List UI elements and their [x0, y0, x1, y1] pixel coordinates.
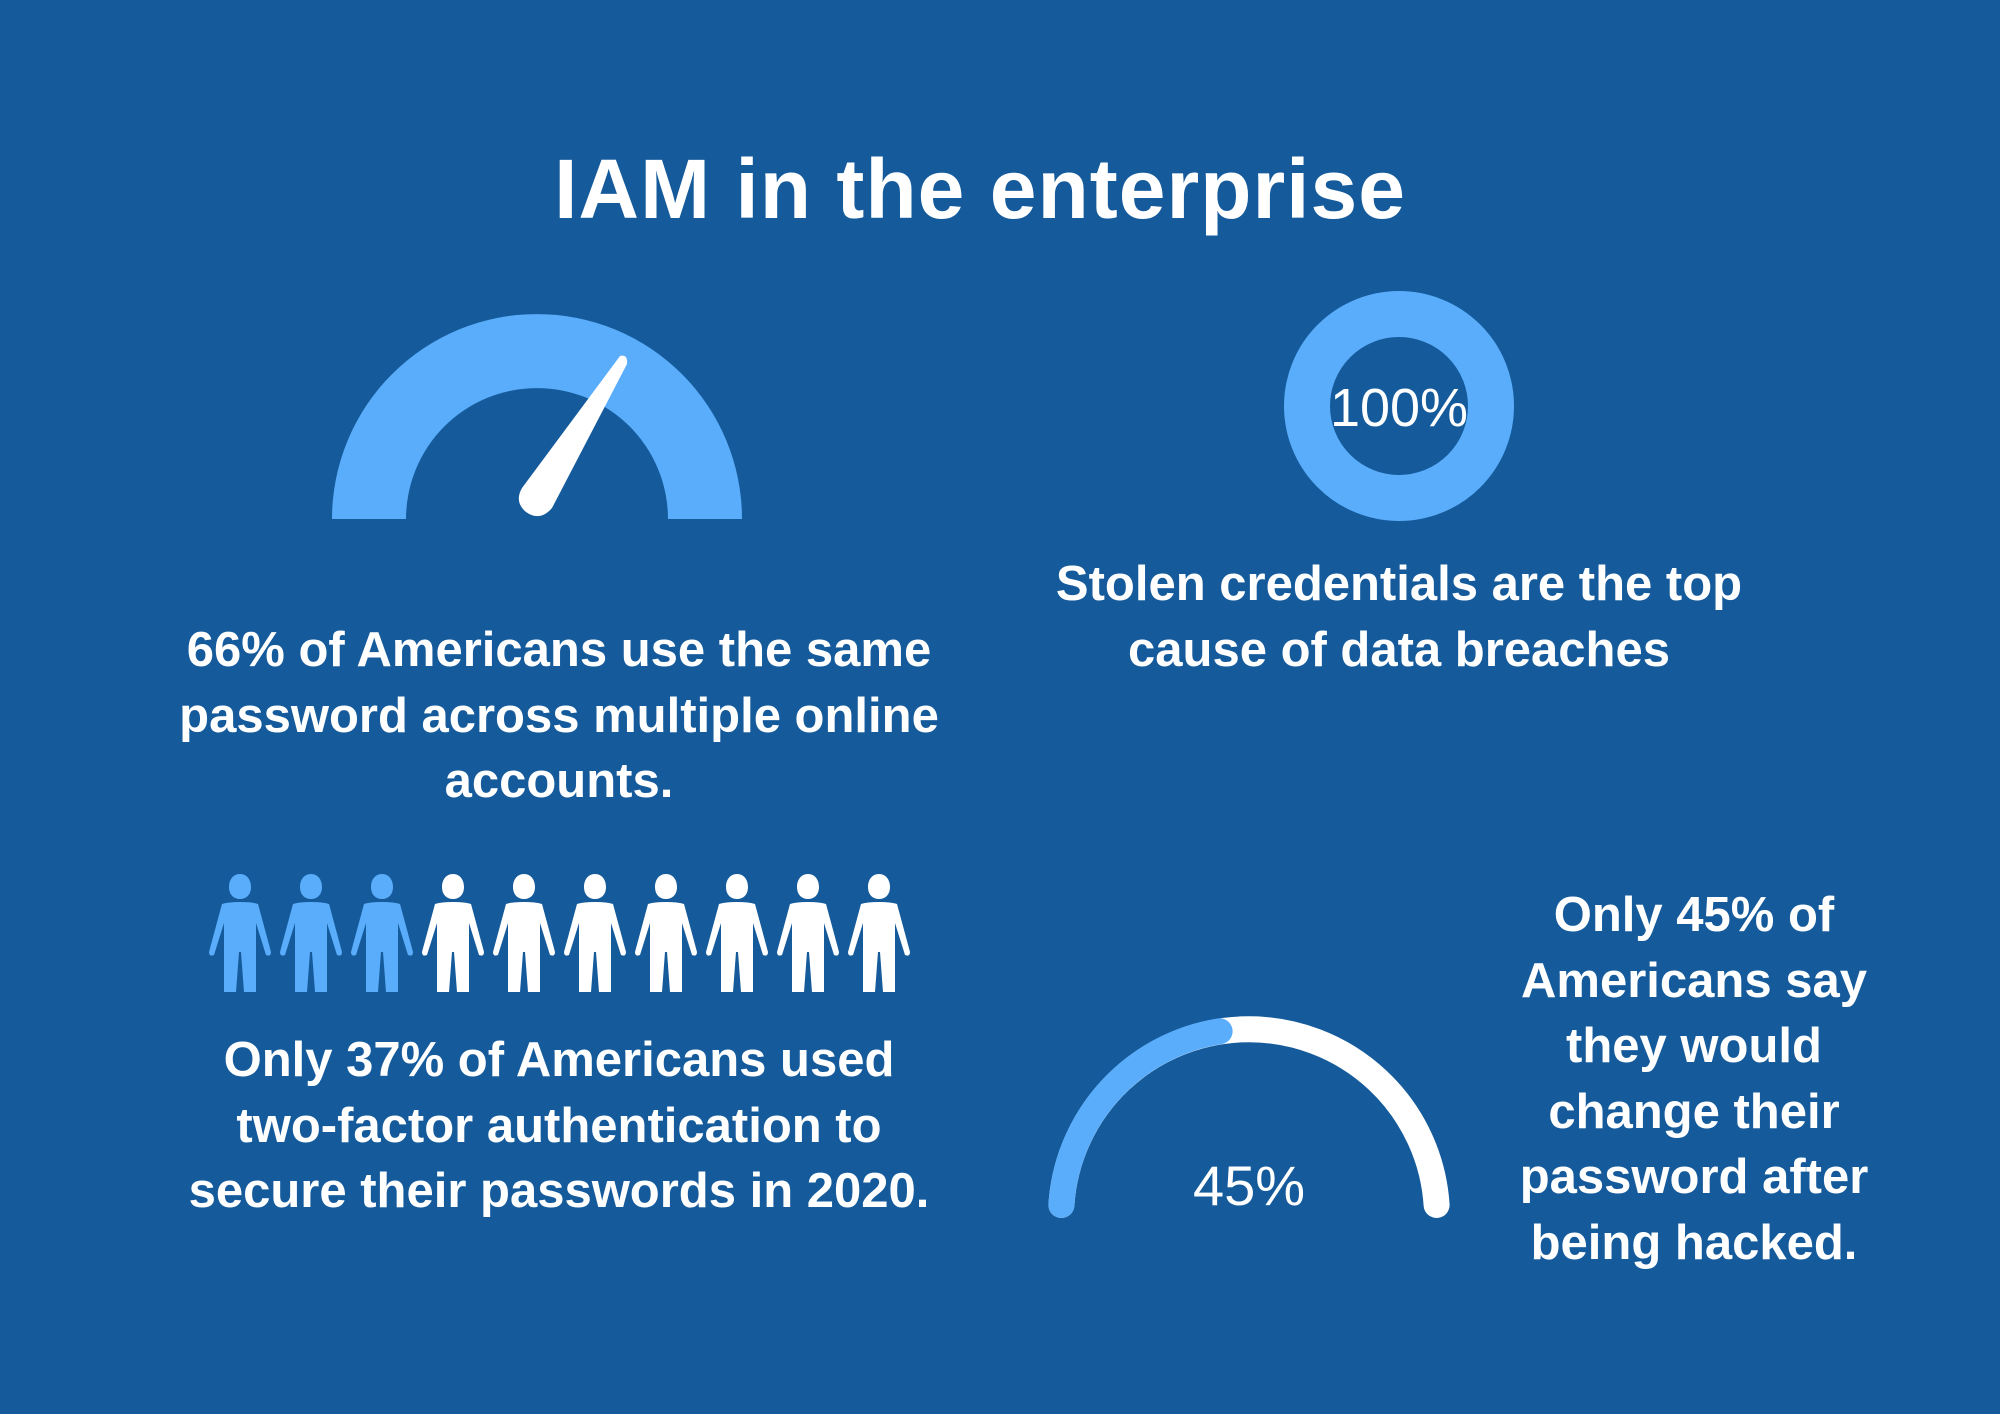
text: 66% same password: accounts.: [445, 754, 673, 808]
text: 45% change password: they would: [1566, 1019, 1822, 1073]
text: 45% change password: Only 45% of: [1554, 888, 1834, 942]
text: 45% change password: [1520, 888, 1868, 1270]
gauge: 45% arc: 45%: [1193, 1154, 1305, 1217]
text: 37% two-factor: [189, 1033, 929, 1218]
title: IAM in the enterprise: [554, 142, 1406, 236]
text: 66% same password: 66% of Americans use the same: [187, 623, 931, 677]
text: 37% two-factor: secure their passwords in 2020.: [189, 1164, 929, 1218]
text: 45% change password: password after: [1520, 1150, 1868, 1204]
gauge: 45% arc: [1061, 1029, 1437, 1217]
text: 37% two-factor: two-factor authentication to: [236, 1098, 882, 1152]
donut chart: 100%: 100%: [1330, 378, 1468, 438]
text: stolen credentials: [1056, 557, 1742, 676]
text: stolen credentials: Stolen credentials are the top: [1056, 557, 1742, 611]
text: 37% two-factor: Only 37% of Americans used: [224, 1033, 894, 1087]
text: 45% change password: being hacked.: [1531, 1216, 1857, 1270]
donut chart: 100%: [1307, 314, 1491, 498]
gauge: speedometer: [332, 314, 742, 519]
people icons: 3 of 10: [209, 874, 910, 992]
text: 66% same password: [179, 623, 939, 808]
text: stolen credentials: cause of data breaches: [1128, 622, 1670, 676]
text: 45% change password: change their: [1548, 1084, 1840, 1138]
text: 45% change password: Americans say: [1521, 954, 1867, 1008]
text: 66% same password: password across multiple online: [179, 688, 939, 742]
